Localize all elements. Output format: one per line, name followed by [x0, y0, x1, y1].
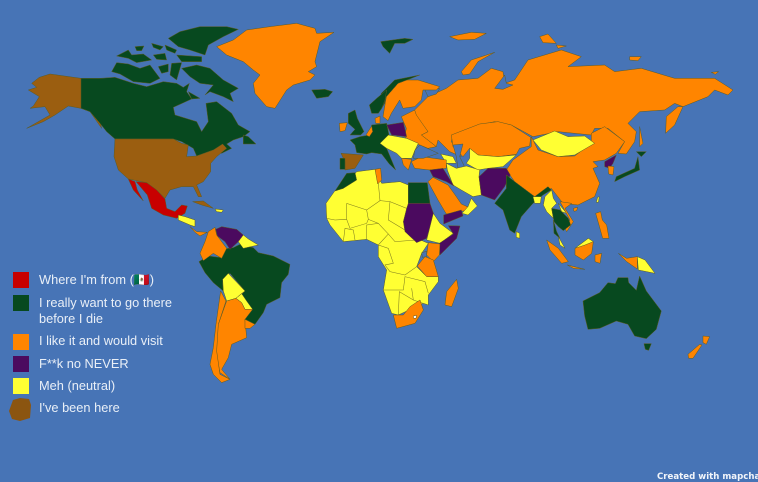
Severnaya Zemlya: [540, 34, 556, 43]
Black Sea: [413, 145, 438, 158]
Bolivia: [223, 273, 245, 301]
Mongolia: [533, 131, 595, 157]
Malaysian Borneo: [575, 238, 593, 248]
South Korea: [608, 166, 614, 175]
China: [506, 127, 625, 205]
legend: like it: I like it and would visit: [39, 333, 163, 348]
Philippines: [596, 212, 609, 238]
Central Asia: [466, 148, 516, 170]
Madagascar: [445, 279, 458, 307]
legend: neutral: Meh (neutral): [39, 378, 115, 393]
Taiwan: [596, 197, 599, 202]
Ethiopia: [427, 213, 453, 243]
Sweden and Finland: [383, 80, 440, 121]
New Zealand south: [688, 344, 702, 358]
legend: [9, 272, 172, 421]
Spain: [341, 153, 363, 170]
Hokkaido: [636, 152, 646, 157]
Kazakhstan: [451, 122, 531, 157]
Iraq and Syria: [430, 168, 454, 186]
Ireland: [339, 123, 347, 132]
Afghanistan and Pakistan: [479, 168, 510, 200]
Tasmania: [644, 344, 651, 350]
Portugal: [340, 158, 345, 169]
Thai peninsula: [553, 220, 560, 238]
Eastern Europe: [380, 135, 418, 158]
map: Oceania: [583, 276, 710, 358]
African country borders: [327, 183, 428, 315]
Sudan: [403, 203, 434, 243]
Norway: [378, 75, 420, 110]
Brazil, Peru and Ecuador: [199, 244, 290, 324]
Laos: [558, 203, 567, 213]
Sakhalin: [640, 127, 643, 147]
Cuba: [193, 201, 213, 208]
map: North America: [27, 23, 334, 236]
Morocco: [335, 173, 357, 191]
legend: really want to go: before I die: [39, 311, 103, 326]
map: Africa: [326, 168, 460, 328]
Paraguay: [236, 294, 253, 312]
South Africa: [393, 300, 423, 328]
map: Russia and Asia: [378, 32, 733, 238]
Malay peninsula: [558, 237, 565, 248]
Hispaniola: [215, 209, 223, 212]
Baltics, Belarus and Ukraine: [401, 110, 436, 148]
Yemen: [444, 210, 463, 224]
Greece: [402, 158, 412, 170]
Hainan: [573, 207, 578, 211]
legend: been here: I've been here: [39, 400, 120, 415]
Egypt: [408, 183, 430, 203]
Africa yellow countries: [326, 169, 438, 315]
Franz Josef Land: [450, 32, 486, 40]
Greenland: [217, 23, 334, 108]
Wrangel island: [711, 72, 719, 74]
Novaya Zemlya: [461, 52, 495, 75]
Tanzania: [417, 257, 438, 277]
France, Germany and Italy: [350, 123, 396, 170]
Russia: [415, 50, 733, 157]
Sulawesi: [595, 253, 602, 263]
North Korea: [605, 155, 616, 168]
India: [495, 175, 551, 233]
USA: [114, 139, 227, 198]
map: Europe: [339, 90, 438, 170]
map: Southeast Asia: [543, 190, 655, 273]
legend: never: F**k no NEVER: [39, 356, 129, 371]
Tunisia: [375, 168, 382, 184]
Caucasus: [441, 154, 456, 163]
Southern Norway: [369, 90, 387, 113]
Mexico: [136, 182, 187, 218]
Bangladesh: [533, 197, 541, 203]
Svalbard: [381, 38, 413, 53]
legend: been here: [9, 398, 120, 421]
Australia: [583, 276, 661, 339]
Myanmar: [543, 190, 557, 218]
Ob Gulf: [495, 75, 513, 89]
Costa Rica and Panama: [190, 227, 207, 236]
Severnaya Zemlya south: [556, 45, 566, 48]
Oman: [462, 198, 477, 215]
White Sea: [425, 89, 440, 97]
Iran: [446, 163, 481, 197]
legend: neutral: [13, 378, 115, 394]
Guyanas: [238, 235, 258, 248]
Poland: [387, 122, 407, 137]
Sumatra: [547, 240, 568, 263]
West Papua: [618, 253, 637, 269]
Venezuela: [216, 227, 243, 249]
Vietnam: [560, 202, 573, 232]
Argentina: [215, 298, 253, 379]
Borneo: [575, 238, 593, 260]
Colombia: [200, 227, 227, 261]
Kenya: [427, 243, 440, 262]
Java: [567, 265, 585, 269]
legend: really want to go: I really want to go there: [39, 295, 172, 310]
Uruguay: [245, 319, 255, 328]
Turkey: [411, 157, 446, 170]
legend: where I'm from: Where I'm from (🇲🇽): [39, 272, 154, 287]
Kamchatka: [666, 107, 683, 133]
Thailand and Cambodia: [552, 208, 571, 231]
Central America: [178, 215, 195, 227]
Canada: [81, 77, 250, 156]
Caspian Sea: [453, 144, 465, 168]
UK: [348, 110, 364, 135]
New Siberian Islands: [630, 57, 641, 61]
Alaska: [27, 74, 102, 128]
Iceland: [312, 89, 333, 98]
Papua New Guinea: [637, 257, 655, 273]
Baja California: [128, 179, 143, 201]
map: South America: [199, 244, 290, 383]
legend: really want to go: [13, 295, 172, 326]
Chile: [210, 291, 230, 383]
Canadian Arctic islands: [112, 27, 256, 144]
map: northern South America: [200, 227, 258, 261]
Benelux: [366, 126, 373, 137]
Japan: [615, 157, 640, 182]
Sri Lanka: [516, 232, 520, 238]
Denmark: [375, 116, 380, 123]
New Zealand north: [703, 336, 710, 344]
Lesotho: [413, 315, 417, 318]
Somalia: [439, 226, 460, 255]
Saudi Arabia: [428, 177, 469, 214]
Lake Victoria: [422, 251, 427, 257]
